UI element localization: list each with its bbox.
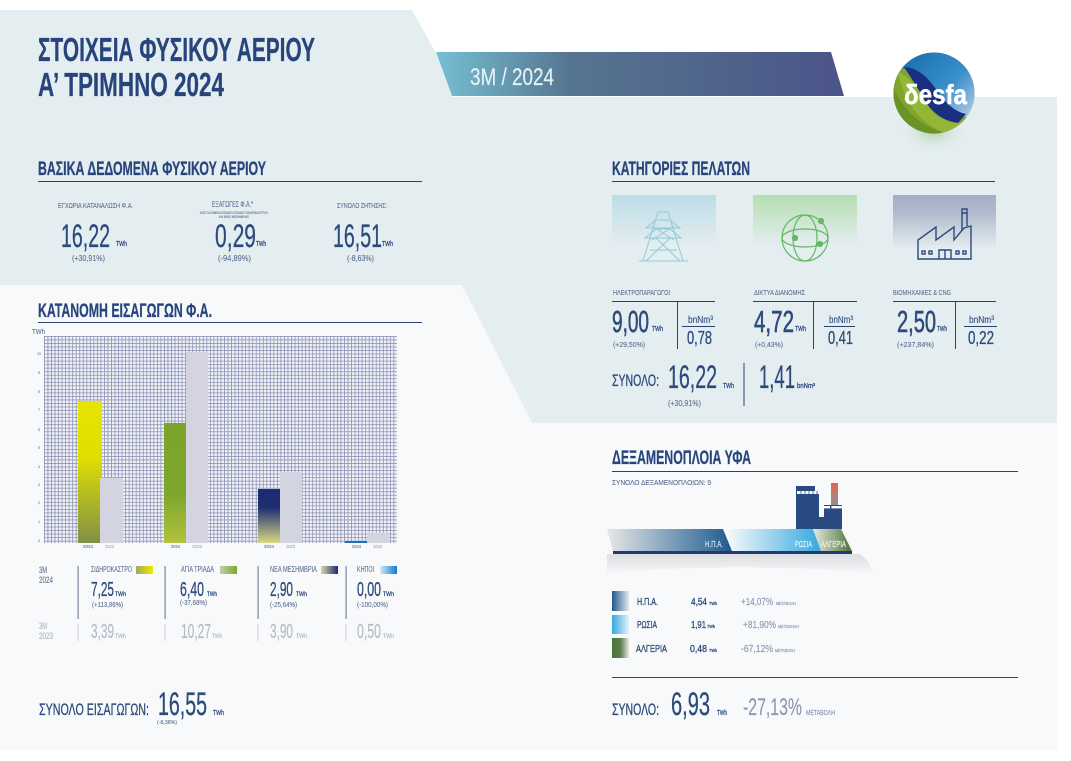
row label: 3M 2024: 2024 xyxy=(39,575,53,585)
customer: distribution networks: (+0,43%) xyxy=(755,340,783,349)
title: ΣΤΟΙΧΕΙΑ ΦΥΣΙΚΟΥ ΑΕΡΙΟΥ xyxy=(38,31,315,68)
legend row: Algeria: 0,48 xyxy=(690,644,707,655)
bar chart: imports by entry point: 2023 xyxy=(373,544,382,549)
customer: distribution networks: TWh xyxy=(795,326,806,333)
bar chart: imports by entry point: 9 xyxy=(38,371,40,375)
customer: power generators: 9,00 xyxy=(612,304,649,339)
customer: industries and CNG: 2,50 xyxy=(897,304,936,339)
customer total: (+30,91%) xyxy=(668,399,701,408)
customer: power generators: bnNm³ xyxy=(688,315,714,326)
entry point: Kipoi: 0,50 xyxy=(357,621,381,643)
icon: factory xyxy=(893,195,996,262)
entry point: Kipoi: 0,00 xyxy=(357,579,381,601)
bar chart: imports by entry point: 2024 xyxy=(83,544,93,549)
customer: power generators: TWh xyxy=(652,326,663,333)
entry point: Sidirokastro: (+113,86%) xyxy=(92,602,123,609)
customer total: 1,41 xyxy=(759,359,795,395)
metric: exports: 0,29 xyxy=(215,218,256,254)
bar chart: imports by entry point: 3 xyxy=(38,483,40,487)
total imports xyxy=(39,686,224,726)
bar chart: imports by entry point xyxy=(32,329,397,549)
customer total: TWh xyxy=(723,383,734,390)
total imports: ΣΥΝΟΛΟ ΕΙΣΑΓΩΓΩΝ: xyxy=(39,700,149,719)
customer total: ΣΥΝΟΛΟ: xyxy=(612,371,659,390)
heading: basic data: ΒΑΣΙΚΑ ΔΕΔΟΜΕΝΑ ΦΥΣΙΚΟΥ ΑΕΡΙΟΥ xyxy=(38,159,266,180)
entry point: Nea Mesimvria: 2,90 xyxy=(270,579,293,601)
row label: 3M 2024 xyxy=(39,565,53,585)
total imports: TWh xyxy=(213,710,224,717)
tanker total: 6,93 xyxy=(671,686,710,722)
customer: power generators xyxy=(612,288,715,349)
bar chart: imports by entry point: 0 xyxy=(38,539,40,543)
tanker total: TWh xyxy=(717,710,727,717)
tanker total: -27,13% xyxy=(743,694,802,721)
tanker total xyxy=(612,677,1018,722)
entry point: Sidirokastro xyxy=(78,565,153,643)
total imports: 16,55 xyxy=(158,686,207,722)
title: Α’ ΤΡΙΜΗΝΟ 2024 xyxy=(38,66,224,103)
metric: exports: ΑΠΟ ΤΑ ΣΗΜΕΙΑ ΕΙΣΟΔΟΥ-ΕΞΟΔΟΥ ΣΙΔΗΡΟΚΑΣΤΡΟΥ xyxy=(200,211,269,215)
metric: exports xyxy=(200,200,269,263)
entry point: Kipoi xyxy=(346,565,397,643)
bar chart: imports by entry point: 10 xyxy=(37,352,41,356)
entry point: Nea Mesimvria: TWh xyxy=(296,591,307,598)
entry point: Agia Triada: TWh xyxy=(207,591,217,598)
legend row: Russia: TWh xyxy=(707,624,715,629)
customer: industries and CNG: (+237,84%) xyxy=(897,340,934,349)
entry point: Agia Triada: 10,27 xyxy=(181,621,211,643)
panel: customer categories xyxy=(612,159,997,408)
customer total xyxy=(612,359,816,408)
metric: domestic consumption: 16,22 xyxy=(61,218,110,254)
metric: exports: TWh xyxy=(256,241,266,248)
entry point: Kipoi: TWh xyxy=(383,591,394,598)
customer: industries and CNG: bnNm³ xyxy=(969,315,995,326)
legend row: USA: ΜΕΤΑΒΟΛΗ xyxy=(776,601,796,606)
entry point: Sidirokastro: ΣΙΔΗΡΟΚΑΣΤΡΟ xyxy=(91,565,132,574)
metric: domestic consumption: TWh xyxy=(116,241,127,248)
entry point: Sidirokastro: 7,25 xyxy=(91,579,114,601)
customer: distribution networks: ΔΙΚΤΥΑ ΔΙΑΝΟΜΗΣ xyxy=(754,288,805,297)
period banner: 3Μ / 2024 xyxy=(470,64,554,91)
customer total: 16,22 xyxy=(668,359,717,395)
tanker total: ΜΕΤΑΒΟΛΗ xyxy=(806,710,835,717)
entry point: Nea Mesimvria: 3,90 xyxy=(270,621,293,643)
heading: customers: ΚΑΤΗΓΟΡΙΕΣ ΠΕΛΑΤΩΝ xyxy=(612,159,750,180)
row label: 3M 2024: 3Μ xyxy=(39,565,47,575)
legend row: Algeria: -67,12% xyxy=(741,643,773,655)
panel: lower background xyxy=(0,285,1057,750)
ship illustration xyxy=(607,483,873,575)
bar chart: imports by entry point: TWh xyxy=(32,329,45,336)
total tankers label: ΣΥΝΟΛΟ ΔΕΞΑΜΕΝΟΠΛΟΙΩΝ: 9 xyxy=(612,480,711,487)
bar chart: imports by entry point: 4 xyxy=(38,465,40,469)
bar chart: imports by entry point: 1 xyxy=(38,520,40,524)
row label: 3M 2023: 3Μ xyxy=(39,621,47,631)
customer: distribution networks: bnNm³ xyxy=(829,315,854,326)
legend row: Russia: ΜΕΤΑΒΟΛΗ xyxy=(778,624,799,629)
metric: exports: (-94,89%) xyxy=(218,254,251,263)
bar chart: imports by entry point: 2023 xyxy=(192,544,202,549)
entry point: Agia Triada: TWh xyxy=(212,633,222,640)
period banner xyxy=(436,52,844,96)
bar chart: imports by entry point: 2024 xyxy=(352,544,361,549)
customer: industries and CNG: TWh xyxy=(937,326,947,333)
metric: total demand: TWh xyxy=(382,241,393,248)
entry point: Kipoi: TWh xyxy=(383,633,394,640)
entry point: Sidirokastro: TWh xyxy=(115,633,126,640)
metric: domestic consumption: (+30,91%) xyxy=(72,254,105,263)
logo: desfa xyxy=(893,52,975,154)
legend row: USA: 4,54 xyxy=(691,597,707,608)
entry point: Nea Mesimvria xyxy=(258,565,338,643)
row label: 3M 2023: 2023 xyxy=(39,631,53,641)
entry point: Nea Mesimvria: (-25,64%) xyxy=(270,602,297,609)
customer: industries and CNG: 0,22 xyxy=(968,328,994,348)
metric: total demand: (-8,63%) xyxy=(347,254,374,263)
legend row: USA: Η.Π.Α. xyxy=(637,597,658,608)
entry point: Kipoi: (-100,00%) xyxy=(357,602,388,609)
legend row: USA: TWh xyxy=(709,601,717,606)
customer: distribution networks: 0,41 xyxy=(828,328,853,348)
title xyxy=(38,31,315,103)
icon: globe network xyxy=(753,195,857,262)
bar chart: imports by entry point: 5 xyxy=(38,446,40,450)
bar chart: imports by entry point: 2023 xyxy=(286,544,295,549)
heading: imports: ΚΑΤΑΝΟΜΗ ΕΙΣΑΓΩΓΩΝ Φ.Α. xyxy=(38,301,212,322)
legend row: Russia xyxy=(612,615,799,634)
metric: domestic consumption xyxy=(58,201,133,263)
legend row: Algeria: TWh xyxy=(709,648,717,653)
entry point: Agia Triada: 6,40 xyxy=(180,579,204,601)
customer: distribution networks xyxy=(753,288,857,349)
legend row: Algeria xyxy=(612,638,795,658)
entry point: Agia Triada xyxy=(164,565,237,643)
metric: total demand xyxy=(333,201,393,263)
panel: LNG tankers xyxy=(607,448,1018,722)
bar chart: imports by entry point: 2024 xyxy=(171,544,180,549)
ship illustration: ΑΛΓΕΡΙΑ xyxy=(821,539,846,549)
bar chart: imports by entry point: 8 xyxy=(38,390,40,394)
tanker total: ΣΥΝΟΛΟ: xyxy=(612,700,659,719)
bar chart: imports by entry point: 6 xyxy=(38,428,40,432)
entry point: Nea Mesimvria: ΝΕΑ ΜΕΣΗΜΒΡΙΑ xyxy=(270,565,317,574)
metric: exports: ΕΞΑΓΩΓΕΣ Φ.Α.* xyxy=(212,200,253,209)
customer: power generators: (+29,50%) xyxy=(613,340,645,349)
customer: power generators: 0,78 xyxy=(687,328,712,348)
metric: domestic consumption: ΕΓΧΩΡΙΑ ΚΑΤΑΝΑΛΩΣΗ Φ.Α. xyxy=(58,201,133,210)
customer: distribution networks: 4,72 xyxy=(754,304,794,339)
bar chart: imports by entry point: 2 xyxy=(38,501,40,505)
icon: power pylon xyxy=(612,195,716,262)
entry point: Sidirokastro: 3,39 xyxy=(91,621,114,643)
legend row: Russia: ΡΩΣΙΑ xyxy=(637,620,657,631)
entry point: Kipoi: ΚΗΠΟΙ xyxy=(357,565,374,574)
legend row: Russia: +81,90% xyxy=(743,619,776,631)
legend row: USA: +14,07% xyxy=(741,596,773,608)
metric: total demand: 16,51 xyxy=(333,218,382,254)
row label: 3M 2023 xyxy=(39,621,53,641)
entry point: Sidirokastro: TWh xyxy=(115,591,126,598)
logo: desfa: δesfa xyxy=(904,79,967,110)
customer: power generators: ΗΛΕΚΤΡΟΠΑΡΑΓΩΓΟΙ xyxy=(613,288,670,297)
panel: top-left and customer background xyxy=(0,10,1057,423)
bar chart: imports by entry point: 2023 xyxy=(105,544,114,549)
ship illustration: Η.Π.Α. xyxy=(705,539,723,549)
customer: industries and CNG: ΒΙΟΜΗΧΑΝΙΕΣ & CNG xyxy=(893,288,951,297)
panel: basic natural gas data xyxy=(38,159,422,263)
entry point: Agia Triada: ΑΓΙΑ ΤΡΙΑΔΑ xyxy=(181,565,214,574)
legend row: Algeria: ΑΛΓΕΡΙΑ xyxy=(636,644,667,655)
metric: exports: ΚΑΙ ΝΕΑΣ ΜΕΣΗΜΒΡΙΑΣ xyxy=(219,215,250,219)
entry point: Agia Triada: (-37,68%) xyxy=(180,600,207,607)
total imports: (-8,36%) xyxy=(157,720,177,726)
ship illustration: ΡΩΣΙΑ xyxy=(795,539,812,549)
legend row: Russia: 1,91 xyxy=(691,620,706,631)
heading: LNG tankers: ΔΕΞΑΜΕΝΟΠΛΟΙΑ ΥΦΑ xyxy=(612,448,751,469)
legend row: Algeria: ΜΕΤΑΒΟΛΗ xyxy=(775,648,795,653)
legend row: USA xyxy=(612,591,796,611)
bar chart: imports by entry point: 7 xyxy=(38,408,40,412)
panel: import distribution xyxy=(32,301,422,726)
bar chart: imports by entry point: 2024 xyxy=(264,544,274,549)
customer: industries and CNG xyxy=(893,288,997,349)
metric: total demand: ΣΥΝΟΛΟ ΖΗΤΗΣΗΣ: xyxy=(337,201,387,210)
entry point: Nea Mesimvria: TWh xyxy=(296,633,307,640)
customer total: bnNm³ xyxy=(797,383,816,390)
